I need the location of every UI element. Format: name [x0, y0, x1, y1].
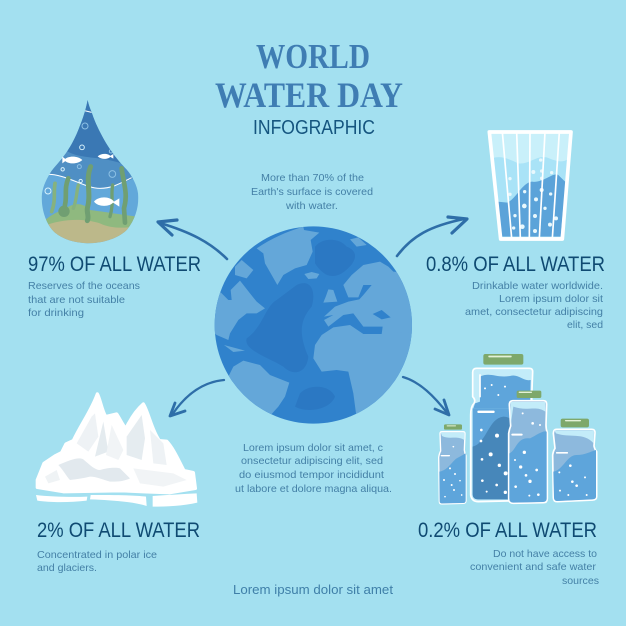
text: center lorem [235, 442, 392, 495]
ocean depth shading [315, 240, 355, 276]
icon: ocean water drop [40, 98, 140, 245]
ice floes [36, 495, 87, 502]
text: drinkable: Lorem ipsum dolor sit [499, 293, 603, 305]
seabed plants [42, 204, 137, 237]
text: oceans: Reserves of the oceans [28, 280, 140, 292]
footer text: Lorem ipsum dolor sit amet [233, 582, 393, 597]
text: oceans: for drinking [28, 307, 84, 319]
text: drinkable: Drinkable water worldwide. [472, 280, 603, 292]
text: drinkable [465, 280, 603, 331]
land: Britain [323, 289, 337, 303]
land: Arctic islands [235, 260, 253, 278]
heading: 0.2%: 0.2% OF ALL WATER [418, 519, 597, 542]
text: center lorem: ut labore et dolore magna aliqua. [235, 483, 392, 495]
bubbles [45, 123, 116, 194]
small jar [439, 424, 466, 504]
heading: 0.8%: 0.8% OF ALL WATER [426, 253, 605, 276]
text: polar ice: and glaciers. [37, 562, 97, 574]
text: intro [251, 172, 373, 212]
land: Cuba [224, 345, 245, 352]
text: oceans: that are not suitable [28, 294, 125, 306]
large jar [471, 354, 543, 502]
arrow: to jars [403, 377, 449, 415]
black sea [373, 310, 391, 319]
text: drinkable: amet, consectetur adipiscing [465, 306, 603, 318]
land: Eurasia [324, 262, 417, 334]
icon: iceberg [36, 394, 197, 507]
land: North America [210, 281, 265, 340]
medium jar [509, 391, 547, 503]
text: intro: More than 70% of the [261, 172, 364, 184]
glass outline and ridges [489, 132, 571, 239]
text: oceans [28, 280, 140, 319]
icon: glass of water [488, 131, 573, 241]
heading: 97%: 97% OF ALL WATER [28, 253, 201, 276]
text: intro: Earth's surface is covered [251, 186, 373, 198]
arrow: to ocean [158, 220, 227, 259]
title: WORLD [256, 37, 370, 76]
right jar [553, 419, 597, 502]
icon: jars [439, 354, 597, 504]
land: Greenland [257, 227, 319, 285]
land: Iceland [304, 272, 319, 279]
fish [62, 154, 119, 207]
bubbles [508, 158, 558, 233]
text: center lorem: onsectetur adipiscing elit, sed [241, 455, 383, 467]
text: no safe water: Do not have access to [493, 548, 597, 560]
title: WATER DAY [215, 75, 403, 115]
land: Africa [313, 325, 412, 414]
text: center lorem: do eiusmod tempor incididunt [239, 469, 384, 481]
text: no safe water: sources [562, 575, 599, 587]
title: INFOGRAPHIC [253, 117, 375, 139]
arrow: to glass [397, 217, 467, 256]
text: intro: with water. [285, 200, 338, 212]
text: no safe water [470, 548, 599, 587]
title [215, 37, 403, 139]
land: Svalbard [350, 237, 367, 247]
land: South America [229, 360, 290, 414]
heading: 2%: 2% OF ALL WATER [37, 519, 200, 542]
text: drinkable: elit, sed [567, 319, 603, 331]
globe [210, 226, 417, 427]
text: center lorem: Lorem ipsum dolor sit amet, c [243, 442, 383, 454]
text: polar ice [37, 549, 157, 574]
text: polar ice: Concentrated in polar ice [37, 549, 157, 561]
text: no safe water: convenient and safe water [470, 561, 597, 573]
arrow: to iceberg [170, 380, 224, 416]
